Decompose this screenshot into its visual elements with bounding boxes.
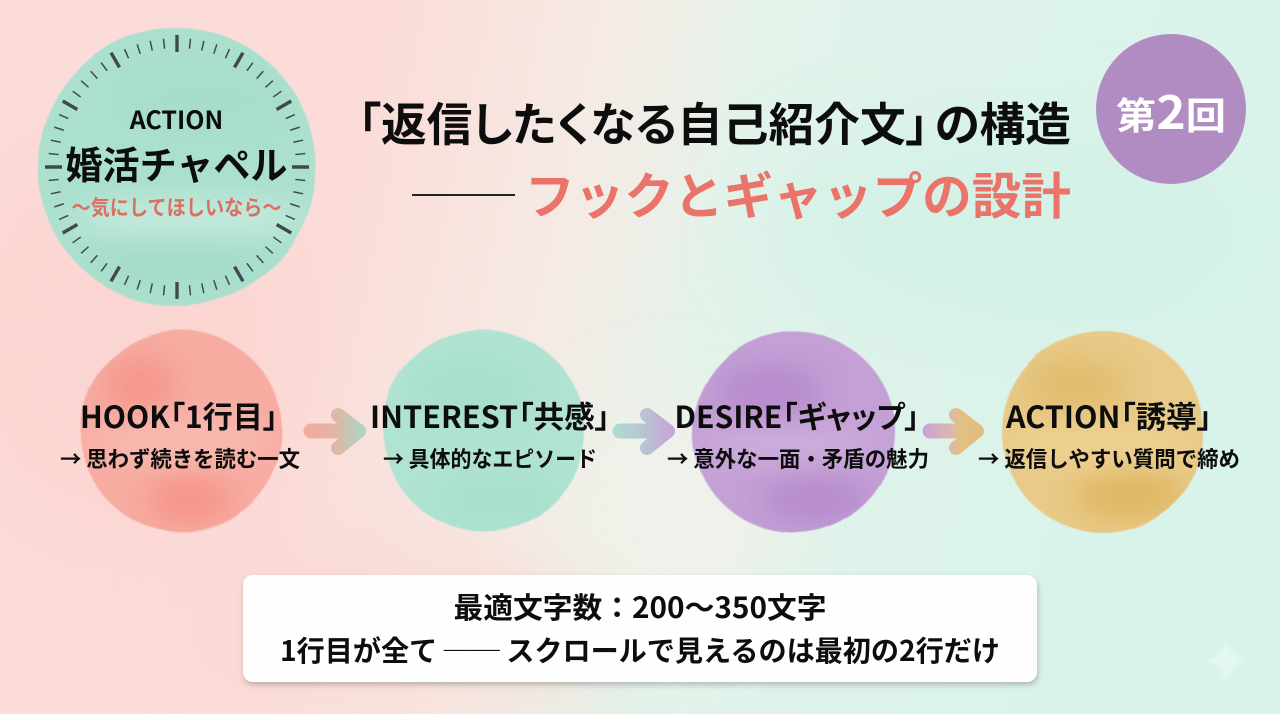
step 4 text: → 返信しやすい質問で締め [978,442,1240,474]
sparkle [1204,638,1248,684]
step 3 text: DESIRE「ギャップ」 [674,393,920,437]
step 1 circle: hook [80,330,282,532]
clock tick marks [36,26,318,308]
summary card [243,575,1037,682]
step 2 text: → 具体的なエピソード [383,442,597,474]
card line 1: 最適文字数：200～350文字 [454,585,826,627]
card line 2: 1行目が全て ── スクロールで見えるのは最初の2行だけ [280,629,1000,670]
step 4 text: ACTION「誘導」 [1005,393,1212,437]
clock badge [36,26,318,308]
step 3 circle: desire [693,331,895,533]
episode badge [1096,34,1246,184]
arrow: hook to interest [311,415,359,448]
step 3 text: → 意外な一面・矛盾の魅力 [667,442,929,474]
step 2 circle: interest [383,330,585,532]
step 2 text [370,393,610,474]
clock face [38,28,316,306]
step 4 text [978,393,1240,474]
badge label: ACTION: ACTION [129,101,223,137]
badge tagline: ～気にしてほしいなら～ [72,192,282,222]
title line 1: 「返信したくなる自己紹介文」の構造 [358,89,1071,155]
step 1 text: → 思わず続きを読む一文 [60,442,300,474]
decorative em dash [412,194,515,196]
title line 2: フックとギャップの設計 [525,157,1071,229]
step 1 text: HOOK「1行目」 [80,393,278,437]
step 3 text [667,393,929,474]
step 4 circle: action [1002,331,1204,533]
arrow: interest to desire [620,415,668,448]
arrow: desire to action [930,415,977,448]
badge name: 婚活チャペル [66,135,288,190]
episode badge: 第2回 [1116,77,1226,143]
step 1 text [60,393,300,474]
step 2 text: INTEREST「共感」 [370,393,610,437]
